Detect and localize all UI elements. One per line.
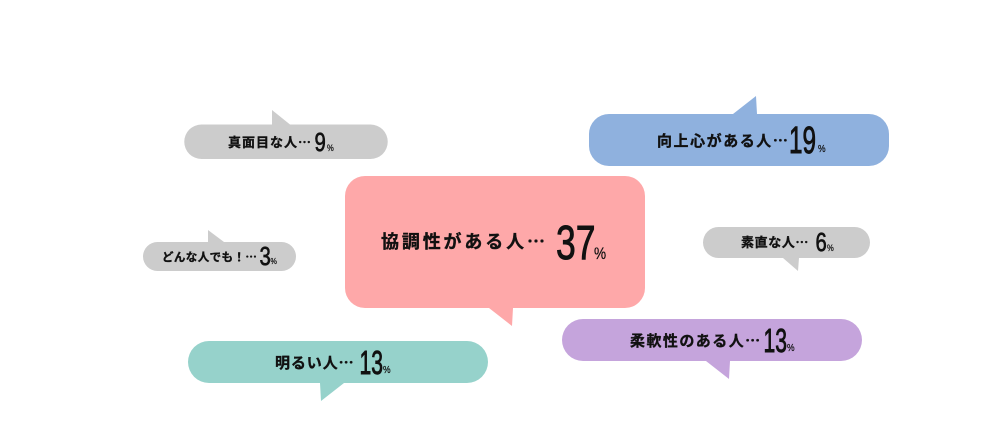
label: 真面目な人… (228, 132, 312, 151)
value: 9 (314, 128, 326, 157)
value: 6 (816, 228, 827, 257)
value: 19 (789, 118, 816, 161)
panel: 向上心がある人 19% (589, 96, 889, 166)
bubble: gray (184, 110, 388, 159)
label: 向上心がある人… (657, 130, 789, 151)
bubble: gray (143, 230, 296, 271)
value: 37 (556, 216, 596, 269)
panel: 協調性がある人 37% (345, 176, 645, 326)
bubble: blue (589, 96, 889, 166)
label: 明るい人… (275, 352, 355, 373)
percent sign: % (383, 364, 391, 375)
value: 3 (260, 242, 271, 271)
value: 13 (764, 322, 787, 359)
panel: 明るい人 13% (188, 341, 488, 401)
panel: どんな人でも！ 3% (143, 230, 296, 271)
percent sign: % (818, 143, 826, 154)
label: 素直な人… (741, 232, 809, 251)
percent sign: % (787, 342, 795, 353)
panel: 柔軟性のある人 13% (562, 319, 862, 379)
percent sign: % (327, 142, 334, 153)
percent sign: % (270, 256, 277, 266)
bubble: pink (345, 176, 645, 326)
percent sign: % (594, 245, 606, 263)
label: 協調性がある人… (381, 228, 548, 254)
bubble: purple (562, 319, 862, 379)
bubble: gray (703, 227, 870, 271)
bubble: teal (188, 341, 488, 401)
panel: 素直な人 6% (703, 227, 870, 271)
value: 13 (360, 344, 383, 381)
label: 柔軟性のある人… (630, 330, 762, 351)
percent sign: % (827, 242, 834, 253)
panel: 真面目な人 9% (184, 110, 388, 159)
label: どんな人でも！… (162, 249, 257, 265)
